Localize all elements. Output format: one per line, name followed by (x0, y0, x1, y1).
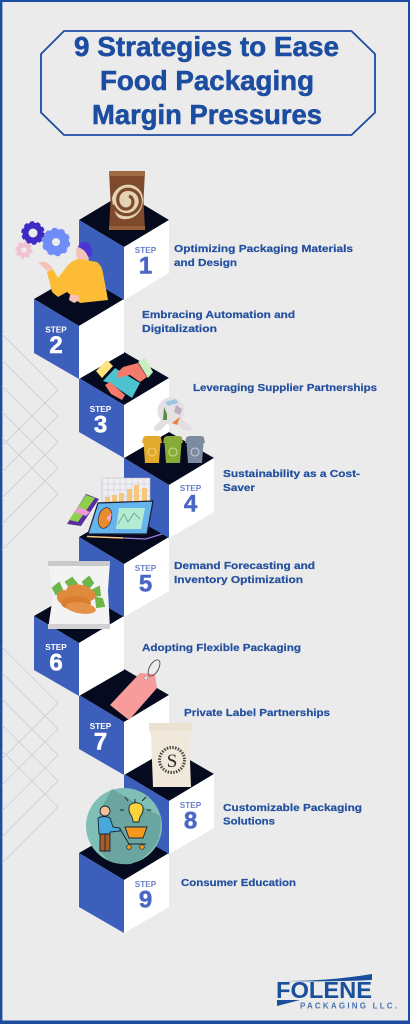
icon: pink price tag (110, 658, 162, 720)
label: step 8 (223, 802, 362, 828)
label: step 8: Solutions (223, 816, 275, 828)
step 6 cube (34, 590, 124, 696)
icon: person with yellow sweater (38, 242, 108, 303)
icon: consumer with bulb and cart (86, 788, 162, 864)
step 5 cube: STEP (135, 564, 157, 573)
step 3 cube: STEP (90, 405, 112, 414)
label: step 2: Digitalization (142, 323, 217, 335)
step 8 cube: STEP (180, 801, 202, 810)
label: step 5 (174, 560, 315, 586)
step 7 cube: 7 (94, 728, 107, 756)
logo: Folene Packaging: FOLENE (276, 977, 372, 1003)
label: step 9: Consumer Education (181, 877, 296, 889)
label: step 3: Leveraging Supplier Partnerships (193, 382, 377, 394)
step 9 cube (79, 827, 169, 933)
icon: handshake (96, 358, 153, 400)
step 2 cube: STEP (45, 326, 67, 334)
step 7 cube: STEP (90, 722, 112, 731)
logo: Folene Packaging: PACKAGING LLC. (300, 1002, 397, 1010)
icon: gears (16, 222, 69, 258)
step 2 cube: 2 (49, 332, 63, 359)
label: step 1: and Design (174, 257, 237, 269)
step 8 cube (124, 748, 214, 854)
icon: chocolate swirl packet (109, 171, 145, 230)
step 1 cube: STEP (135, 246, 157, 255)
label: step 8: Customizable Packaging (223, 802, 362, 814)
step 3 cube (79, 352, 169, 458)
label: step 2: Embracing Automation and (142, 309, 295, 321)
step 9 cube: STEP (135, 880, 157, 889)
label: step 6: Adopting Flexible Packaging (142, 642, 301, 654)
step 5 cube: 5 (139, 570, 152, 598)
step 6 cube: STEP (45, 643, 67, 652)
step 9 cube: 9 (139, 886, 152, 914)
step 4 cube (124, 432, 214, 538)
label: step 1 (174, 243, 353, 269)
label: step 4: Sustainability as a Cost- (223, 468, 361, 480)
step 5 cube (79, 511, 169, 617)
label: step 2 (142, 309, 295, 335)
step 1 cube (79, 193, 169, 300)
icon: customizable pouch (149, 723, 192, 787)
step 1 cube: 1 (139, 252, 152, 280)
icon: customizable pouch: S (167, 751, 177, 772)
title: Food Packaging (100, 65, 314, 96)
label: step 7: Private Label Partnerships (184, 707, 330, 719)
step 2 cube (34, 273, 124, 379)
step 4 cube: 4 (184, 490, 198, 518)
step 3 cube: 3 (94, 412, 107, 438)
title: Margin Pressures (92, 99, 322, 130)
step 8 cube: 8 (184, 808, 197, 834)
label: step 4: Saver (223, 482, 255, 494)
title: 9 Strategies to Ease (74, 31, 339, 62)
label: step 5: Demand Forecasting and (174, 560, 315, 572)
logo: Folene Packaging (276, 974, 397, 1010)
label: step 5: Inventory Optimization (174, 574, 303, 586)
icon: carrot chip bag (48, 561, 110, 629)
step 7 cube (79, 669, 169, 775)
label: step 4 (223, 468, 361, 494)
step 6 cube: 6 (49, 650, 63, 676)
icon: analytics laptop and money (67, 478, 162, 539)
step 4 cube: STEP (180, 484, 202, 493)
title (41, 31, 375, 135)
icon: waste circle (154, 398, 192, 431)
label: step 1: Optimizing Packaging Materials (174, 243, 353, 255)
icon: recycling bins (142, 436, 205, 463)
